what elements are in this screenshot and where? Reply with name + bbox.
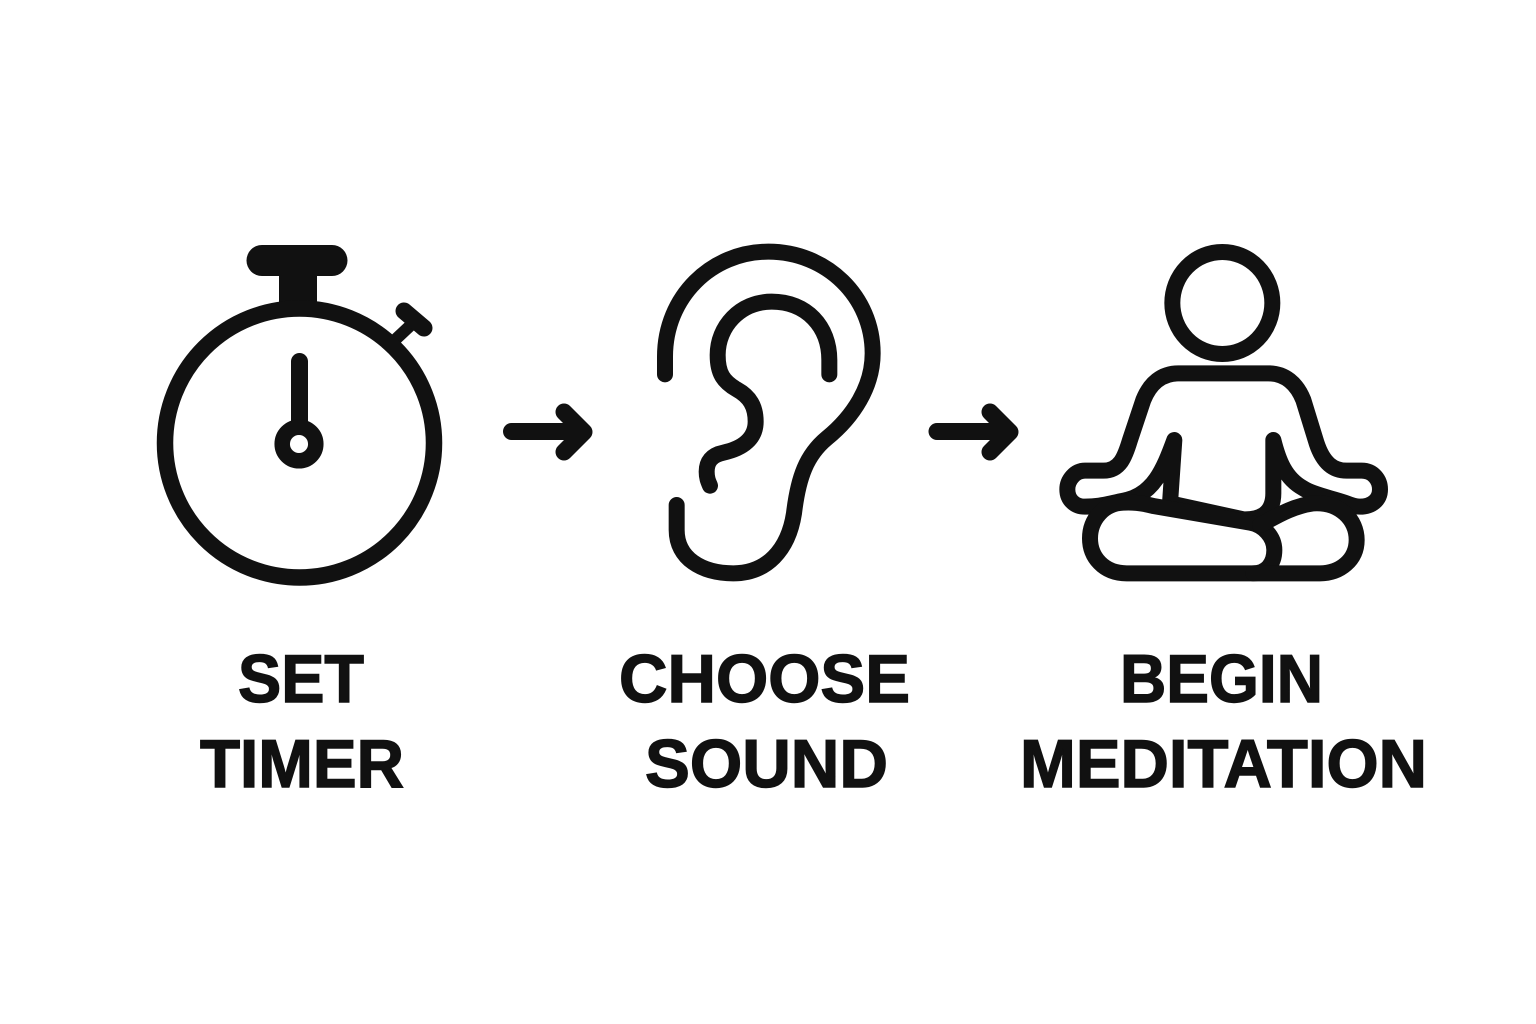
icon: meditating person <box>1067 252 1380 573</box>
stopwatch dial <box>165 308 434 578</box>
back leg <box>1253 503 1357 573</box>
arrow: timer to sound <box>512 412 584 452</box>
front leg <box>1090 502 1274 573</box>
head <box>1172 252 1272 354</box>
stopwatch side button cap <box>404 311 424 328</box>
label: choose sound <box>619 641 910 802</box>
label: begin meditation: BEGIN <box>1120 641 1323 717</box>
stopwatch hand <box>291 362 308 424</box>
label: set timer: TIMER <box>200 726 404 802</box>
label: set timer <box>200 641 404 802</box>
stopwatch side button stem <box>396 324 412 339</box>
label: choose sound: SOUND <box>645 726 888 802</box>
label: choose sound: CHOOSE <box>619 641 910 717</box>
label: begin meditation: MEDITATION <box>1020 726 1427 802</box>
icon: stopwatch <box>165 245 434 578</box>
ear inner contour <box>707 302 829 486</box>
label: set timer: SET <box>238 641 364 717</box>
torso and arms <box>1067 373 1380 519</box>
label: begin meditation <box>1020 641 1427 802</box>
arrow: sound to meditation <box>937 412 1010 452</box>
stopwatch top button <box>246 245 347 306</box>
ear outer contour <box>665 252 873 573</box>
icon: ear <box>665 252 873 573</box>
stopwatch hub <box>282 427 316 461</box>
